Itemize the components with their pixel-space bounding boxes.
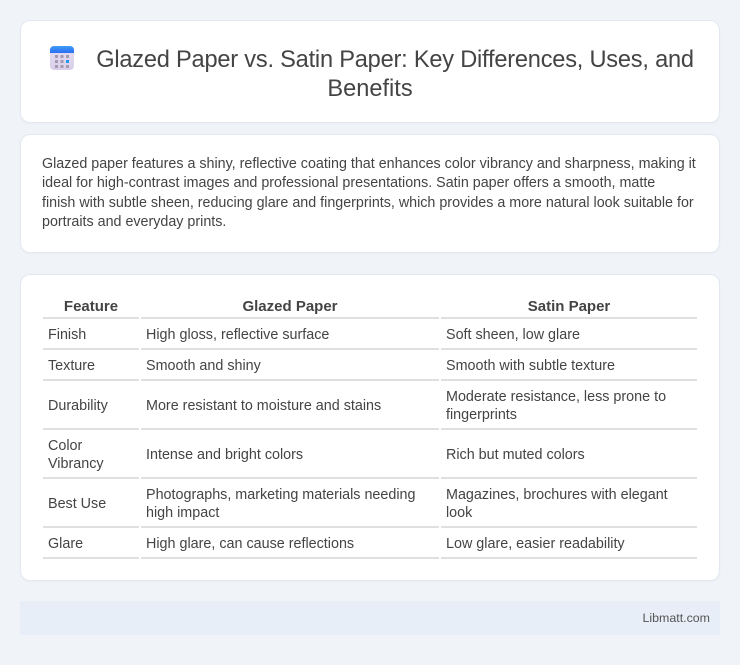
- row: finish: High gloss, reflective surface: [146, 327, 329, 343]
- table header: [43, 298, 697, 319]
- row: best use: high impact: [146, 505, 219, 521]
- intro text: ideal for high-contrast images and professional presentations. Satin paper offers a smooth, matte: [42, 175, 655, 191]
- footer attribution: Libmatt.com: [643, 610, 710, 624]
- footer bar: [20, 601, 720, 635]
- panel: comparison table card: [20, 274, 720, 581]
- icon: calendar: [50, 46, 74, 70]
- row: texture: Smooth and shiny: [146, 358, 261, 374]
- row: durability: More resistant to moisture and stains: [146, 398, 381, 414]
- row: finish: Soft sheen, low glare: [446, 327, 580, 343]
- row: color vibrancy: Color: [48, 438, 82, 454]
- intro text: Glazed paper features a shiny, reflective coating that enhances color vibrancy and sharpness, making it: [42, 156, 696, 172]
- row: best use: look: [446, 505, 472, 521]
- intro text: portraits and everyday prints.: [42, 214, 226, 230]
- row: texture: Smooth with subtle texture: [446, 358, 615, 374]
- title: [96, 47, 694, 102]
- row: texture: [43, 358, 697, 381]
- row: best use: Magazines, brochures with elegant: [446, 487, 668, 503]
- row: finish: [43, 327, 697, 350]
- title: Benefits: [327, 76, 413, 102]
- row: color vibrancy: Vibrancy: [48, 456, 104, 472]
- row: durability: [43, 389, 697, 430]
- intro text: finish with subtle sheen, reducing glare and fingerprints, which provides a more natural look suitable for: [42, 195, 694, 211]
- row: best use: [43, 487, 697, 528]
- table header: Feature: [64, 298, 118, 315]
- row: glare: Low glare, easier readability: [446, 536, 625, 552]
- row: durability: Moderate resistance, less prone to: [446, 389, 666, 405]
- table header: Satin Paper: [528, 298, 610, 315]
- header card: [20, 20, 720, 123]
- row: color vibrancy: [43, 438, 697, 479]
- intro text: [42, 156, 696, 230]
- row: color vibrancy: Rich but muted colors: [446, 447, 585, 463]
- row: color vibrancy: Intense and bright colors: [146, 447, 303, 463]
- title: Glazed Paper vs. Satin Paper: Key Differences, Uses, and: [96, 47, 694, 73]
- row: texture: Texture: [48, 358, 95, 374]
- row: durability: Durability: [48, 398, 108, 414]
- row: glare: High glare, can cause reflections: [146, 536, 354, 552]
- comparison table: [43, 298, 697, 559]
- row: best use: Best Use: [48, 496, 106, 512]
- row: finish: Finish: [48, 327, 86, 343]
- row: best use: Photographs, marketing materials needing: [146, 487, 416, 503]
- panel: introduction: [20, 134, 720, 253]
- row: durability: fingerprints: [446, 407, 517, 423]
- row: glare: Glare: [48, 536, 83, 552]
- table header: Glazed Paper: [242, 298, 338, 315]
